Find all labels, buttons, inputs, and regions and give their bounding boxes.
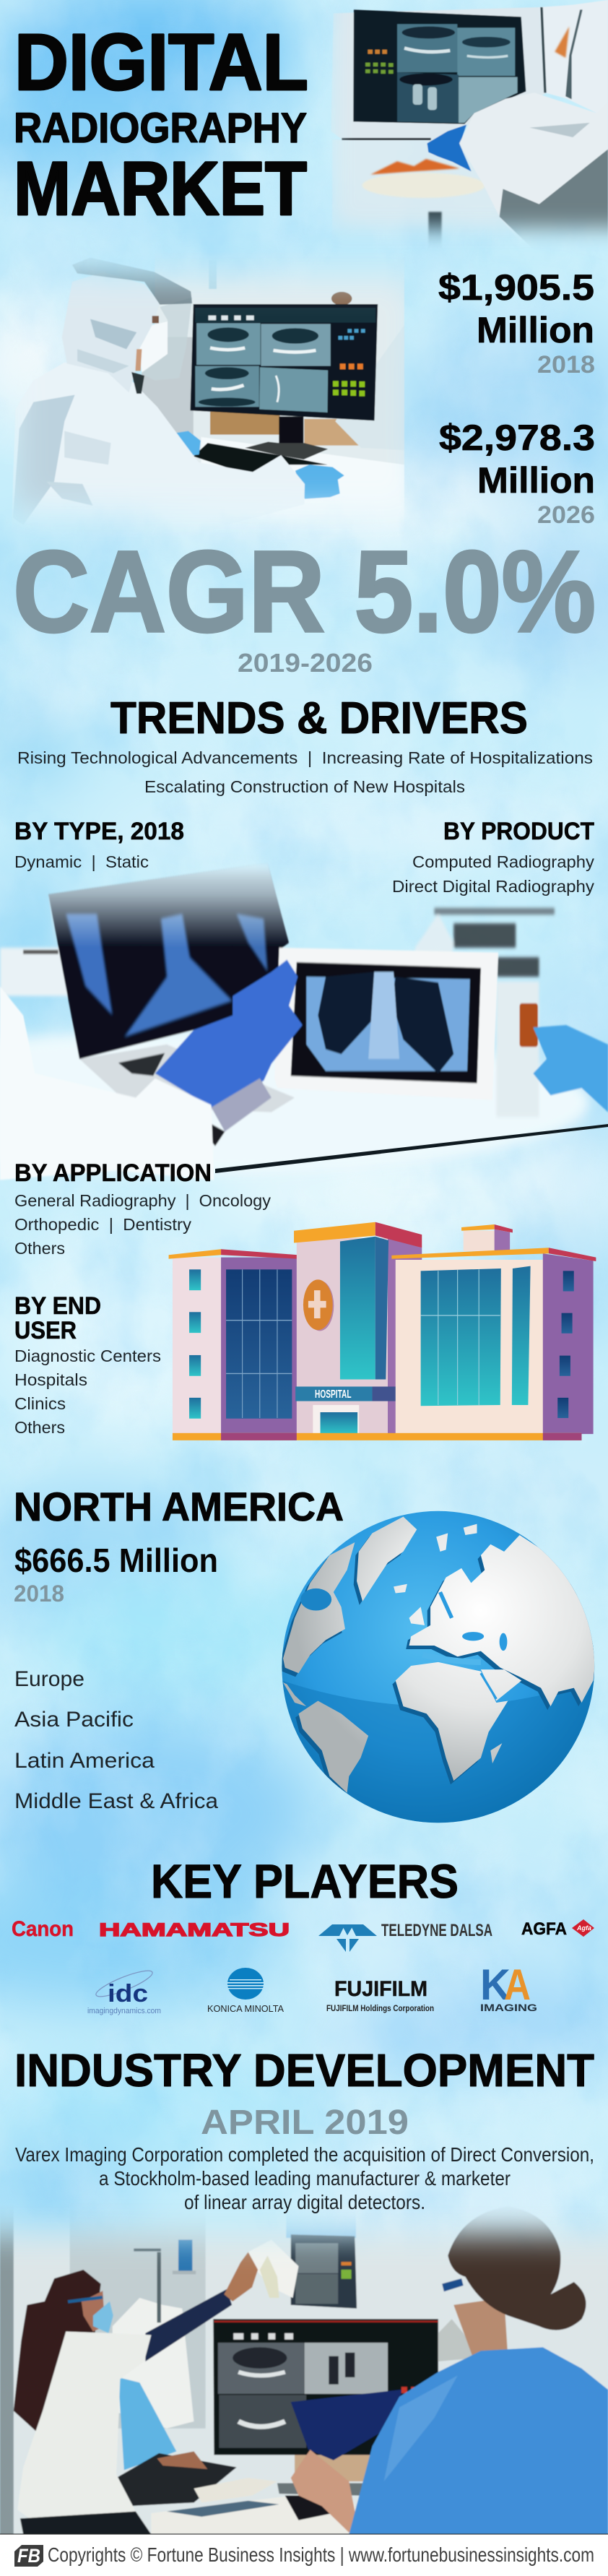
title <box>14 18 308 231</box>
by end user: Others <box>14 1418 65 1437</box>
logo: KA Imaging: A <box>504 1961 531 2009</box>
north america: $666.5 Million <box>14 1542 218 1579</box>
by product: Computed Radiography <box>412 852 595 871</box>
logo: Fujifilm: FUJIFILM <box>334 1977 427 2001</box>
table edge <box>215 1124 608 1173</box>
by application: Orthopedic | Dentistry <box>14 1215 192 1234</box>
photo: technician in protective suit at x-ray workstation <box>12 253 404 542</box>
logo: Teledyne Dalsa <box>318 1921 492 1952</box>
CAGR: 2019-2026 <box>238 648 373 678</box>
other regions: Europe <box>14 1667 84 1691</box>
trends and drivers: Rising Technological Advancements | Increasing Rate of Hospitalizations <box>17 748 593 767</box>
logo: Hamamatsu: HAMAMATSU <box>99 1920 290 1940</box>
by type <box>14 818 184 871</box>
market value 2018: Million <box>477 310 594 350</box>
by product: Direct Digital Radiography <box>392 877 595 896</box>
logo: Canon: Canon <box>12 1917 74 1941</box>
logo: Teledyne Dalsa: TELEDYNE DALSA <box>381 1921 492 1940</box>
footer logo: FB <box>17 2545 40 2567</box>
photo: gloved hands holding chest x-ray tablet <box>0 863 608 1180</box>
footer <box>0 2534 608 2576</box>
other regions: Asia Pacific <box>14 1708 134 1732</box>
by end user <box>14 1292 161 1437</box>
by end user: BY END <box>14 1292 101 1320</box>
logo: KA Imaging: IMAGING <box>480 2002 537 2013</box>
trends and drivers <box>17 693 593 796</box>
north america: NORTH AMERICA <box>14 1484 344 1529</box>
logo: IDC: idc <box>108 1980 148 2007</box>
north america: 2018 <box>14 1581 64 1607</box>
logo: Fujifilm <box>326 1977 434 2013</box>
market value 2026: Million <box>477 460 595 501</box>
by end user: Diagnostic Centers <box>14 1347 161 1365</box>
industry development: of linear array digital detectors. <box>184 2191 425 2213</box>
by application: BY APPLICATION <box>14 1159 212 1187</box>
north america <box>14 1484 344 1607</box>
icon: hospital building: HOSPITAL <box>315 1388 352 1401</box>
title: DIGITAL <box>14 18 308 107</box>
logo: Agfa <box>521 1919 594 1939</box>
logo: Konica Minolta <box>207 1968 284 2014</box>
by product: BY PRODUCT <box>443 818 594 845</box>
logo: Konica Minolta: KONICA MINOLTA <box>207 2003 284 2014</box>
logo: IDC <box>87 1966 161 2015</box>
other regions: Middle East & Africa <box>14 1789 218 1813</box>
industry development: INDUSTRY DEVELOPMENT <box>14 2044 594 2096</box>
industry development <box>14 2044 594 2213</box>
trends and drivers: Escalating Construction of New Hospitals <box>144 777 465 796</box>
market value 2018: 2018 <box>537 351 595 379</box>
other regions: Latin America <box>14 1749 155 1773</box>
photo: technician pointing at dental x-ray tablet <box>331 0 608 260</box>
key players: KEY PLAYERS <box>151 1854 459 1908</box>
logo: Fujifilm: FUJIFILM Holdings Corporation <box>326 2003 434 2013</box>
logo: IDC: imagingdynamics.com <box>87 2007 161 2015</box>
by end user: Clinics <box>14 1394 66 1413</box>
icon: hospital building <box>169 1222 596 1440</box>
by end user: USER <box>14 1317 77 1344</box>
photo: dentists reviewing x-rays <box>0 2199 608 2534</box>
trends and drivers: TRENDS & DRIVERS <box>110 693 528 743</box>
market value 2018: $1,905.5 <box>438 267 594 308</box>
by end user: Hospitals <box>14 1370 87 1389</box>
by type: Dynamic | Static <box>14 852 149 871</box>
by product <box>392 818 595 896</box>
by application: General Radiography | Oncology <box>14 1191 272 1210</box>
by application <box>14 1159 272 1258</box>
industry development: a Stockholm-based leading manufacturer & marketer <box>99 2167 511 2190</box>
industry development: APRIL 2019 <box>201 2104 409 2142</box>
title: RADIOGRAPHY <box>14 105 307 152</box>
by application: Others <box>14 1239 65 1258</box>
logo: Agfa: Agfa <box>576 1924 591 1932</box>
logo: KA Imaging <box>480 1961 537 2013</box>
market value 2018 <box>438 267 595 379</box>
other regions <box>14 1667 218 1813</box>
logo: Agfa: AGFA <box>521 1919 567 1939</box>
by type: BY TYPE, 2018 <box>14 818 184 845</box>
market value 2026: 2026 <box>537 501 595 529</box>
market value 2026 <box>439 418 595 529</box>
market value 2026: $2,978.3 <box>439 418 595 458</box>
icon: globe <box>280 1511 597 1824</box>
title: MARKET <box>14 147 307 231</box>
logo: KA Imaging: K <box>480 1961 511 2009</box>
